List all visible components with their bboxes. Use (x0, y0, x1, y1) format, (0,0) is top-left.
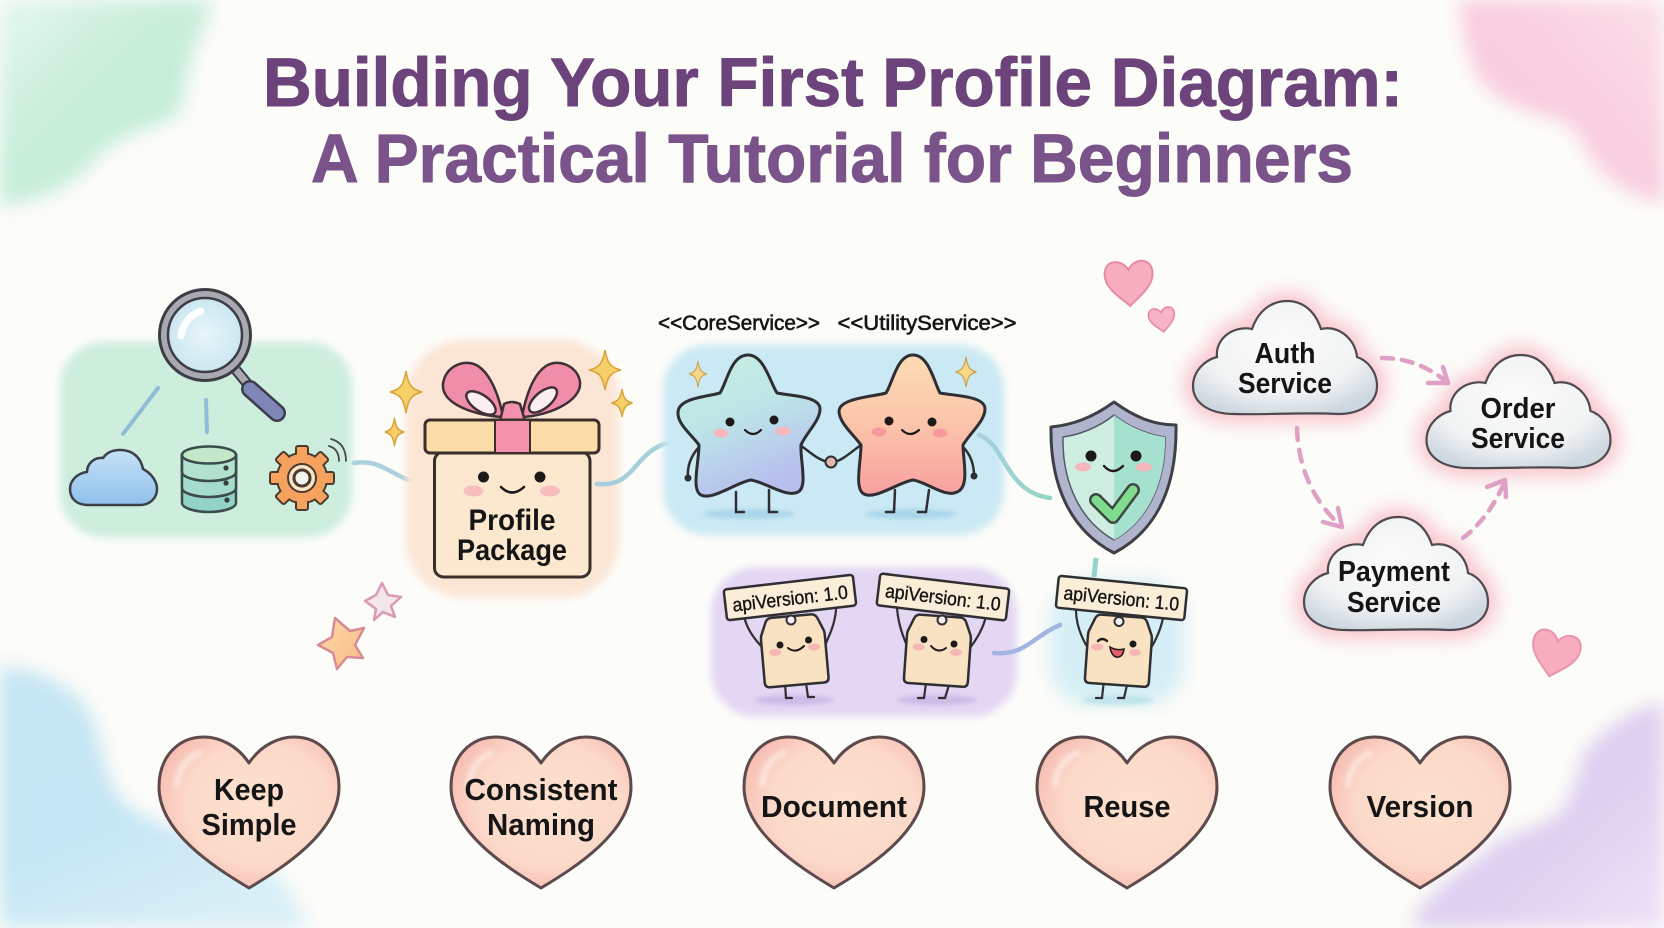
holding hands (826, 456, 836, 468)
panel: discovery (green) (60, 288, 352, 537)
panel: versioned tags background (teal) (1050, 558, 1184, 705)
icon: signal waves (329, 439, 346, 461)
cloud: order service: Order (1480, 393, 1556, 425)
tag mascot two: apiVersion: 1.0 (884, 581, 1002, 616)
tag mascot one: apiVersion: 1.0 (731, 582, 849, 617)
cloud: auth service: Auth (1254, 338, 1316, 370)
tag mascot one (724, 575, 856, 705)
icon: gold sparkles (385, 350, 632, 446)
gift box lid (425, 420, 599, 453)
background blob: pink (1459, 0, 1664, 203)
arrow: auth to order (1382, 358, 1448, 383)
cloud: payment service: Service (1347, 587, 1441, 619)
cloud: auth service (1193, 301, 1377, 414)
arrow: discovery to package (354, 462, 425, 483)
stereotype labels: <<CoreService>> (658, 312, 820, 335)
panel: versioned tags (purple) (711, 567, 1017, 717)
stereotype labels: <<UtilityService>> (838, 312, 1016, 335)
arrow: services to shield (979, 435, 1050, 498)
title: Building Your First Profile Diagram: (263, 44, 1403, 121)
best practice heart: version: Version (1366, 789, 1474, 824)
icon: database (182, 446, 236, 512)
star sparkles (689, 357, 976, 387)
icon: cloud (70, 450, 157, 505)
package label (457, 504, 567, 567)
arrow: tags connector (994, 625, 1060, 653)
best practice heart: document: Document (761, 789, 907, 824)
best practice heart: reuse: Reuse (1084, 789, 1170, 824)
best practice heart: keep simple: Simple (202, 807, 296, 842)
cloud: payment service: Payment (1338, 556, 1450, 588)
stereotype labels (658, 312, 1016, 335)
package label: Package (457, 534, 567, 567)
connector lines from magnifier (123, 388, 207, 434)
utility service star (834, 355, 985, 512)
best practice heart: keep simple: Keep (214, 772, 284, 807)
title: A Practical Tutorial for Beginners (311, 120, 1353, 197)
best practice heart: version (1330, 737, 1510, 888)
arrow: package to services (597, 441, 681, 484)
background blob: blue (0, 667, 307, 928)
package face (464, 472, 560, 496)
background blob: green (0, 0, 212, 207)
best practice heart: consistent naming: Consistent (464, 772, 618, 807)
icon: pink heart small (1148, 306, 1177, 334)
ground shadows (703, 509, 957, 519)
tag mascot two (877, 573, 1009, 705)
panel: profile package (peach) (385, 340, 632, 598)
cloud: order service: Service (1471, 423, 1565, 455)
best practice heart: consistent naming: Naming (487, 807, 595, 842)
tag mascot three (1056, 576, 1187, 705)
tag mascot three: apiVersion: 1.0 (1063, 583, 1180, 616)
icon: pink heart lower right (1526, 627, 1583, 682)
panel: services (blue) (663, 345, 1004, 535)
package label: Profile (468, 504, 556, 537)
icon: bow (443, 363, 580, 421)
arrow: auth to payment (1297, 428, 1342, 527)
cloud: payment service (1304, 517, 1488, 630)
background blob: purple (1410, 703, 1664, 928)
best practice heart: keep simple (159, 737, 339, 888)
icon: magnifying glass (158, 288, 277, 413)
best practice heart: consistent naming (451, 737, 631, 888)
best practice heart: reuse (1037, 737, 1217, 888)
icon: pink heart large (1104, 260, 1154, 307)
best practice heart: document (744, 737, 924, 888)
icon: small decorative stars (318, 583, 401, 669)
icon: gear (270, 446, 334, 510)
cloud: auth service: Service (1238, 368, 1332, 400)
gift box body (434, 452, 590, 577)
core service star (678, 355, 828, 512)
title (263, 44, 1403, 197)
icon: shield (1051, 402, 1176, 553)
cloud: order service (1426, 355, 1610, 468)
arrow: payment to order (1463, 480, 1506, 538)
